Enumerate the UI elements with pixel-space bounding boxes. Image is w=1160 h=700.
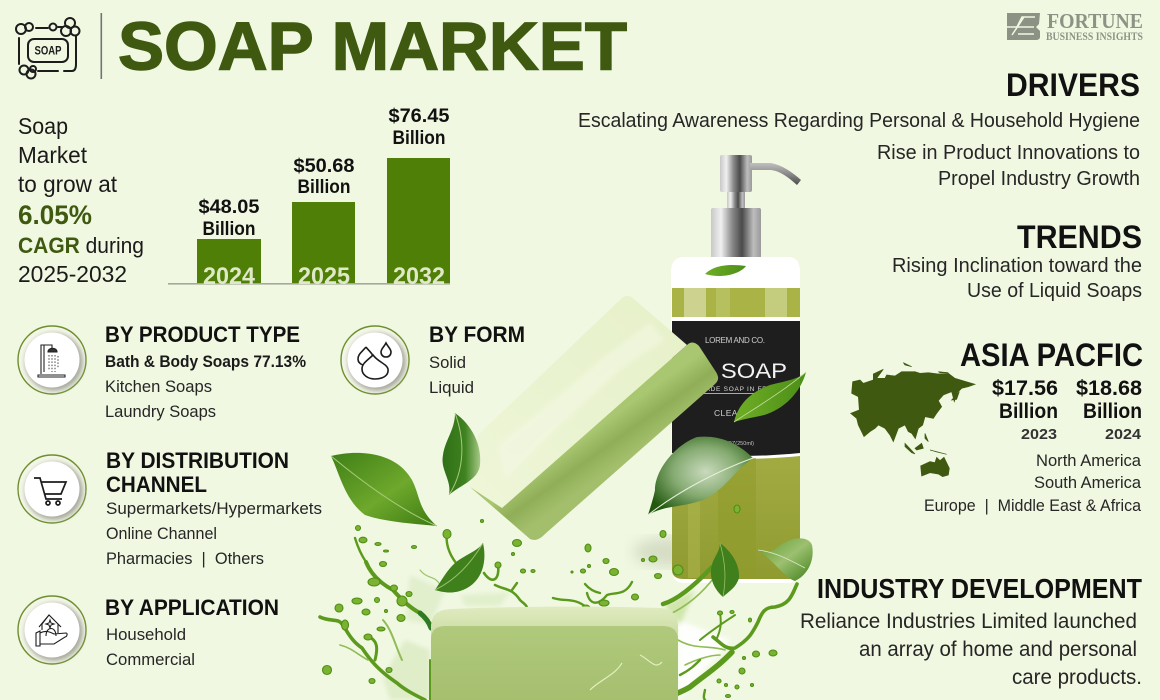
growth text block: Market: [18, 142, 88, 168]
title: SOAP MARKET: [118, 8, 627, 84]
leaf: large left: [331, 453, 437, 526]
section: Asia Pacific figures: North America: [1036, 451, 1142, 470]
section: industry development: care products.: [1012, 666, 1142, 689]
icon: droplets: [341, 326, 409, 394]
bar chart: market size: Billion: [298, 176, 350, 198]
segment: by product type: Bath & Body Soaps 77.13%: [105, 353, 306, 371]
segment: by distribution channel: CHANNEL: [106, 472, 207, 497]
product: bottle shadow: [633, 537, 717, 567]
section: Asia Pacific figures: [924, 337, 1143, 515]
section: Asia Pacific figures: Billion: [1083, 400, 1142, 423]
leaf: over splash: [435, 543, 484, 593]
segment: by application: BY APPLICATION: [105, 595, 279, 620]
segment: by distribution channel: Supermarkets/Hypermarkets: [106, 500, 322, 518]
segment: by product type: BY PRODUCT TYPE: [105, 322, 300, 347]
icon: shower: [18, 326, 86, 394]
product: liquid soap bottle: CLEAN: [714, 408, 744, 418]
bar chart: market size: 2025: [298, 263, 350, 290]
segment: by form: [429, 322, 525, 397]
map: Asia Pacific: [851, 363, 975, 477]
growth text block: CAGR during: [18, 233, 144, 258]
segment: by form: Liquid: [429, 379, 474, 397]
segment: by form: BY FORM: [429, 322, 525, 347]
growth text block: [18, 113, 144, 287]
product: liquid soap bottle: LOREM AND CO.: [705, 336, 765, 345]
growth text block: 2025-2032: [18, 261, 127, 287]
title divider: [100, 13, 102, 79]
bar chart: market size: Billion: [392, 127, 446, 149]
product: liquid soap bottle: LIQUID SOAP: [635, 360, 787, 383]
product: liquid soap bottle: 4 OZ(250ml): [723, 441, 754, 447]
section: Asia Pacific figures: South America: [1034, 473, 1142, 492]
section: Asia Pacific figures: ASIA PACFIC: [960, 337, 1143, 373]
product: liquid soap bottle: [635, 155, 801, 583]
segment: by distribution channel: Pharmacies | Others: [106, 550, 264, 568]
segment: by application: Commercial: [106, 651, 195, 669]
section: drivers: [578, 67, 1140, 190]
logo: Fortune Business Insights: [1007, 9, 1143, 43]
section: Asia Pacific figures: Billion: [999, 400, 1058, 423]
section: drivers: Escalating Awareness Regarding Personal & Household Hygiene: [578, 110, 1140, 132]
product: droplets: [322, 505, 777, 698]
leaf: small on bottle: [705, 265, 746, 276]
segment: by distribution channel: BY DISTRIBUTION: [106, 448, 289, 473]
bar chart: market size: $76.45: [388, 105, 450, 127]
section: Asia Pacific figures: $17.56: [992, 377, 1058, 400]
bar chart: market size: Billion: [202, 218, 256, 240]
section: Asia Pacific figures: $18.68: [1076, 377, 1142, 400]
segment: by product type: Laundry Soaps: [105, 403, 216, 421]
bar chart: market size: 2024: [203, 263, 255, 290]
section: industry development: Reliance Industries Limited launched: [800, 610, 1137, 633]
segment: by application: [105, 595, 279, 669]
segment: by product type: [105, 322, 306, 421]
product: liquid soap bottle: HANDMADE SOAP IN FRANCE: [678, 386, 789, 393]
section: trends: TRENDS: [1017, 219, 1142, 255]
section: trends: [892, 219, 1142, 302]
bar chart: market size: $50.68: [294, 155, 355, 177]
icon: shopping cart: [18, 455, 86, 523]
segment: by distribution channel: Online Channel: [106, 525, 217, 543]
bar chart: market size: [168, 105, 450, 290]
section: industry development: an array of home and personal: [859, 638, 1137, 661]
title icon: soap bar: [16, 18, 80, 78]
growth text block: 6.05%: [18, 200, 92, 230]
product: splash strands: [320, 532, 797, 700]
icon: home care hand: [18, 596, 86, 664]
bar chart: market size: 2032: [393, 263, 445, 290]
leaf: right curl: [758, 538, 813, 581]
section: trends: Use of Liquid Soaps: [967, 280, 1142, 302]
logo: Fortune Business Insights: FORTUNE: [1047, 9, 1143, 33]
section: Asia Pacific figures: Europe | Middle East & Africa: [924, 496, 1142, 515]
section: industry development: [800, 573, 1142, 689]
segment: by application: Household: [106, 626, 186, 644]
section: Asia Pacific figures: 2024: [1105, 426, 1142, 443]
leaf: upright by soap: [443, 413, 480, 495]
leaf: lower bottle: [711, 543, 739, 597]
section: drivers: Propel Industry Growth: [938, 168, 1140, 190]
title icon: soap bar: SOAP: [34, 44, 62, 58]
product: tilted soap bar: [470, 296, 718, 540]
segment: by form: Solid: [429, 354, 466, 372]
section: drivers: DRIVERS: [1006, 67, 1140, 103]
product: splash mist: [383, 575, 730, 700]
product: bottom soap bar: [431, 607, 678, 700]
section: drivers: Rise in Product Innovations to: [877, 142, 1140, 164]
section: trends: Rising Inclination toward the: [892, 255, 1142, 277]
segment: by product type: Kitchen Soaps: [105, 378, 212, 396]
segment: by distribution channel: [106, 448, 322, 568]
growth text block: to grow at: [18, 171, 118, 197]
logo: Fortune Business Insights: BUSINESS INSIGHTS: [1046, 31, 1143, 43]
growth text block: Soap: [18, 113, 68, 139]
section: Asia Pacific figures: 2023: [1021, 426, 1057, 443]
leaf: large right with veins: [648, 437, 753, 515]
leaf: top on label: [734, 372, 806, 422]
bar chart: market size: $48.05: [198, 196, 260, 218]
